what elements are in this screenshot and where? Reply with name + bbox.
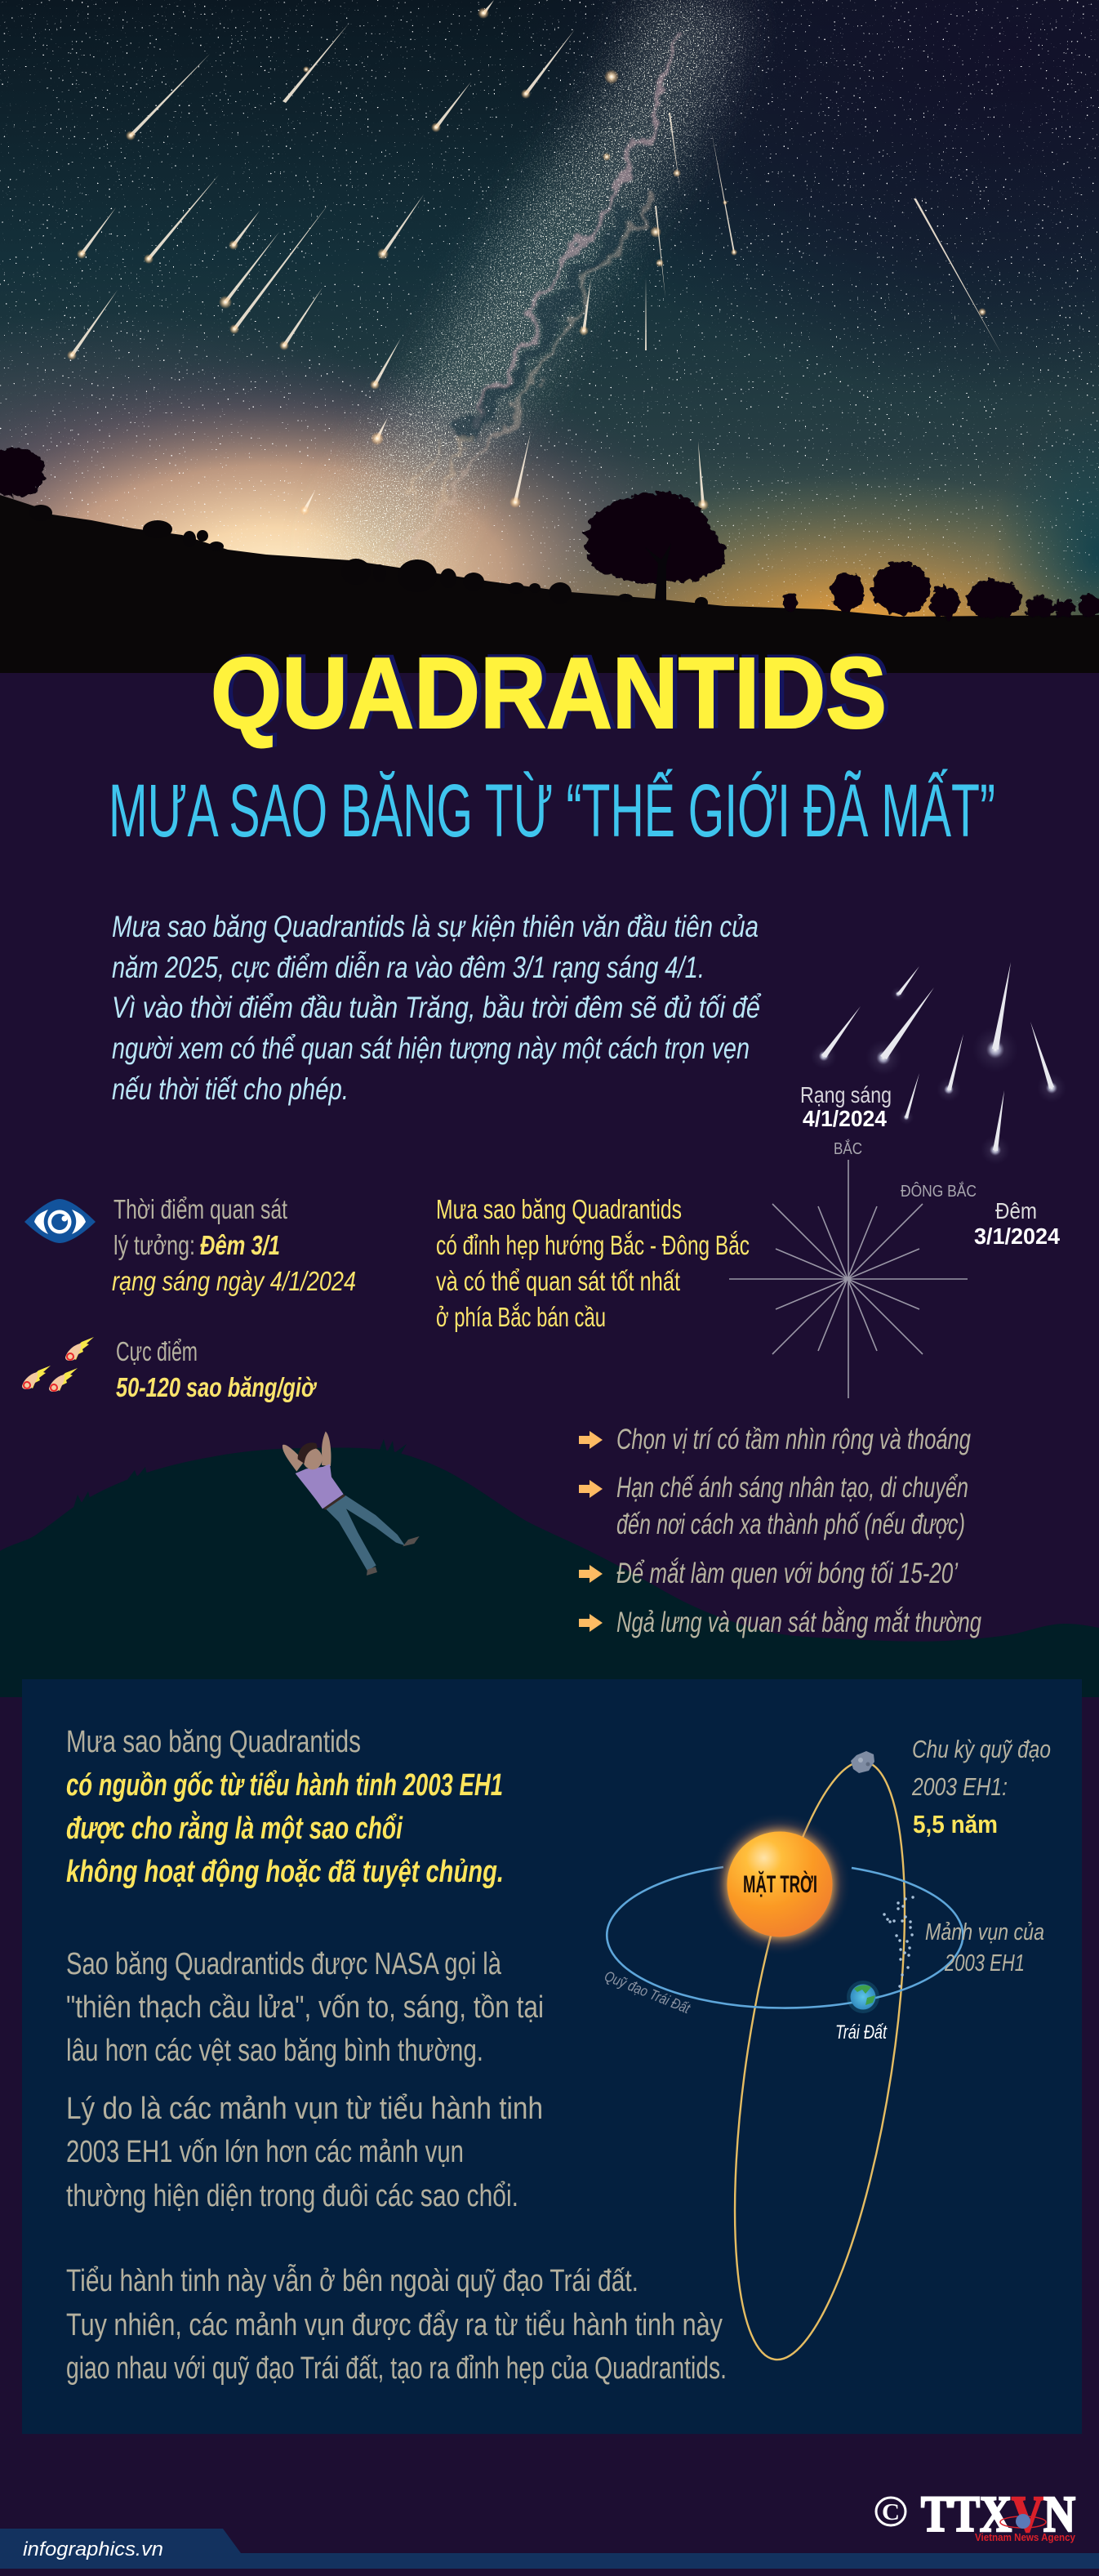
asteroid orbit — [703, 1751, 937, 2370]
observation time text: lý tưởng: — [113, 1230, 195, 1260]
tips list — [579, 1424, 981, 1638]
boulders and shrubs — [29, 505, 796, 612]
orbit diagram — [603, 1735, 1051, 2370]
observation time text: rạng sáng ngày 4/1/2024 — [112, 1266, 356, 1296]
ground silhouette — [0, 495, 1099, 673]
hill silhouette — [0, 1439, 1099, 1697]
direction labels — [800, 1082, 1060, 1249]
panel: origin of Quadrantids — [22, 1679, 1082, 2434]
tree trunk — [645, 543, 671, 600]
paragraph: NASA fireballs — [66, 1947, 544, 2068]
radiant description: ở phía Bắc bán cầu — [436, 1302, 606, 1332]
panel heading text: có nguồn gốc từ tiểu hành tinh 2003 EH1 — [66, 1768, 503, 1803]
peak rate text — [116, 1336, 318, 1402]
logo: TTXVN: TTXVN — [921, 2487, 1075, 2543]
meteor streaks — [70, 0, 1002, 511]
footer bar — [0, 2529, 1099, 2569]
paragraph: NASA fireballs: Sao băng Quadrantids được NASA gọi là — [66, 1947, 502, 1981]
observation time text: Đêm 3/1 — [200, 1230, 280, 1260]
comet 3 — [49, 1368, 78, 1392]
paragraph: orbit crossing: Tiểu hành tinh này vẫn ở bên ngoài quỹ đạo Trái đất. — [66, 2263, 638, 2298]
logo: TTXVN: C — [882, 2500, 900, 2525]
paragraph: NASA fireballs: "thiên thạch cầu lửa", vốn to, sáng, tồn tại — [66, 1990, 544, 2025]
shoes — [367, 1536, 420, 1575]
tips text: đến nơi cách xa thành phố (nếu được) — [616, 1509, 965, 1540]
icon: comets — [22, 1337, 94, 1392]
paragraph: larger debris — [66, 2092, 543, 2213]
label: Earth orbit: Quỹ đạo Trái Đất — [603, 1968, 693, 2017]
head — [303, 1448, 323, 1469]
paragraph: larger debris: 2003 EH1 vốn lớn hơn các mảnh vụn — [66, 2135, 464, 2169]
panel heading text: được cho rằng là một sao chổi — [66, 1810, 403, 1846]
hair — [298, 1442, 318, 1464]
sun: MẶT TRỜI — [743, 1870, 817, 1898]
belt — [324, 1495, 345, 1509]
small meteors illustration — [811, 962, 1066, 1165]
radiant description — [436, 1194, 750, 1332]
website credit: infographics.vn — [23, 2538, 163, 2560]
label: orbital period: 5,5 năm — [913, 1810, 998, 1838]
intro paragraph: người xem có thể quan sát hiện tượng này một cách trọn vẹn — [112, 1032, 750, 1065]
tree silhouettes — [0, 448, 1099, 618]
label: debris: Mảnh vụn của — [925, 1919, 1044, 1945]
paragraph: NASA fireballs: lâu hơn các vệt sao băng bình thường. — [66, 2034, 483, 2068]
radiant description: và có thể quan sát tốt nhất — [436, 1266, 680, 1296]
tips text: Chọn vị trí có tầm nhìn rộng và thoáng — [616, 1424, 971, 1455]
direction labels: Rạng sáng — [800, 1082, 892, 1108]
jeans — [326, 1495, 405, 1571]
intro paragraph: nếu thời tiết cho phép. — [112, 1072, 349, 1106]
label: orbital period — [911, 1735, 1051, 1838]
direction labels: 4/1/2024 — [803, 1106, 887, 1131]
label: Earth: Trái Đất — [835, 2021, 888, 2043]
tips text: Hạn chế ánh sáng nhân tạo, di chuyển — [616, 1472, 968, 1504]
star field — [0, 0, 1099, 637]
label: debris: 2003 EH1 — [944, 1950, 1025, 1977]
radiant starburst diagram — [729, 1160, 968, 1398]
intro paragraph: Vì vào thời điểm đầu tuần Trăng, bầu trời đêm sẽ đủ tối để — [112, 991, 762, 1024]
tips text: Để mắt làm quen với bóng tối 15-20’ — [616, 1558, 959, 1589]
comet 1 — [65, 1337, 94, 1361]
intro paragraph: Mưa sao băng Quadrantids là sự kiện thiên văn đầu tiên của — [112, 910, 759, 943]
direction labels: Đêm — [995, 1198, 1037, 1223]
panel heading text: Mưa sao băng Quadrantids — [66, 1725, 361, 1759]
paragraph: orbit crossing — [66, 2263, 727, 2386]
paragraph: larger debris: Lý do là các mảnh vụn từ tiểu hành tinh — [66, 2092, 543, 2126]
earth — [847, 1981, 879, 2013]
comet 2 — [22, 1366, 51, 1389]
paragraph: larger debris: thường hiện diện trong đuôi các sao chổi. — [66, 2179, 518, 2213]
arrow bullets — [579, 1431, 603, 1632]
label: debris — [925, 1919, 1044, 1977]
asteroid 2003 EH1 — [851, 1751, 874, 1773]
panel heading text — [66, 1725, 504, 1889]
radiant description: Mưa sao băng Quadrantids — [436, 1194, 682, 1224]
sun — [708, 1812, 852, 1956]
debris cloud — [884, 1897, 913, 1986]
intro paragraph: năm 2025, cực điểm diễn ra vào đêm 3/1 rạng sáng 4/1. — [112, 951, 705, 984]
direction labels: BẮC — [834, 1139, 862, 1158]
direction labels: ĐÔNG BẮC — [901, 1181, 977, 1201]
logo: TTXVN: Vietnam News Agency — [975, 2531, 1076, 2543]
observation time text: Thời điểm quan sát — [113, 1194, 287, 1224]
panel heading text: không hoạt động hoặc đã tuyệt chủng. — [66, 1855, 504, 1889]
paragraph: orbit crossing: Tuy nhiên, các mảnh vụn được đẩy ra từ tiểu hành tinh này — [66, 2308, 723, 2342]
peak rate text: 50-120 sao băng/giờ — [116, 1372, 318, 1402]
intro paragraph — [112, 910, 762, 1106]
radiant description: có đỉnh hẹp hướng Bắc - Đông Bắc — [436, 1230, 750, 1260]
peak rate text: Cực điểm — [116, 1336, 198, 1366]
icon: eye — [24, 1199, 96, 1243]
person lying on hill — [283, 1432, 420, 1575]
earth orbit — [607, 1867, 963, 2008]
label: orbital period: Chu kỳ quỹ đạo — [912, 1735, 1051, 1763]
shirt — [296, 1464, 344, 1509]
arms — [283, 1432, 331, 1472]
meteor heads — [67, 7, 986, 515]
sky gradient — [0, 0, 1099, 617]
paragraph: orbit crossing: giao nhau với quỹ đạo Trái đất, tạo ra đỉnh hẹp của Quadrantids. — [66, 2351, 727, 2386]
title: QUADRANTIDS — [211, 638, 887, 750]
observation time text — [112, 1194, 356, 1296]
tips text — [616, 1424, 981, 1638]
title: QUADRANTIDS — [214, 636, 890, 748]
direction labels: 3/1/2024 — [974, 1223, 1060, 1249]
milky way — [367, 0, 694, 572]
hero photo: night sky with meteors — [0, 0, 1099, 673]
label: orbital period: 2003 EH1: — [911, 1772, 1008, 1801]
